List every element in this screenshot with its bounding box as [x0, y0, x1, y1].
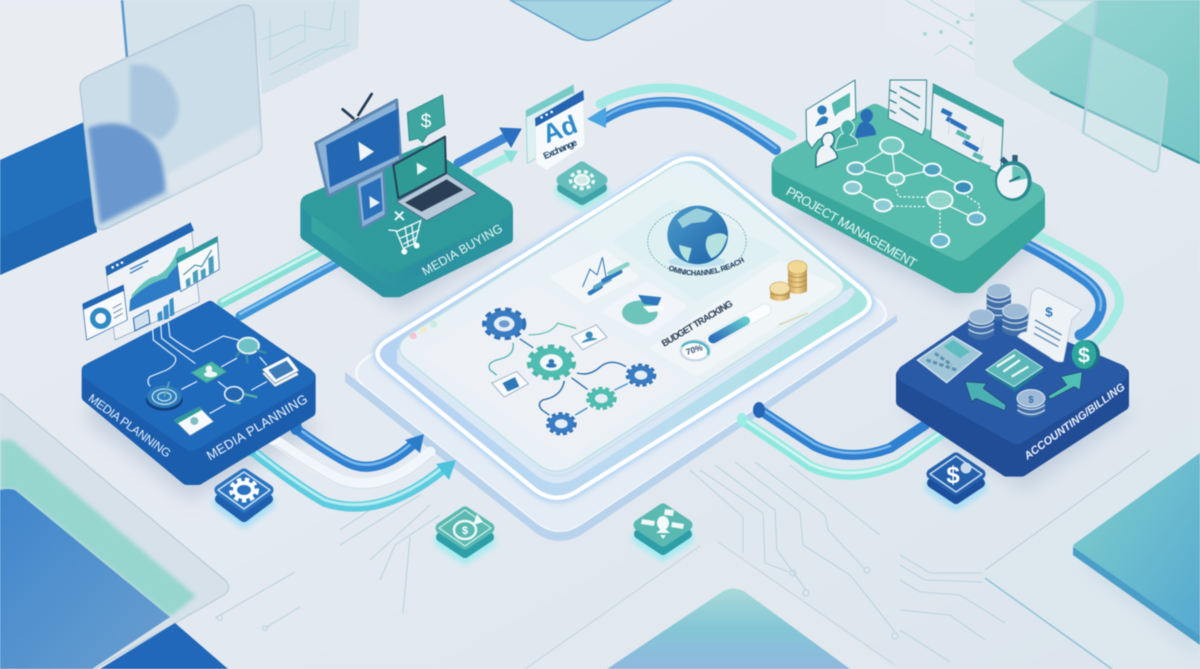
icon: small teal gear	[588, 388, 615, 408]
label: ACCOUNTING/BILLING	[1021, 381, 1128, 463]
window dots	[410, 321, 437, 339]
icon: gantt window	[931, 84, 1003, 175]
label: Ad: Ad	[538, 109, 581, 149]
icon: receipt	[1017, 288, 1082, 362]
icon: left arrow	[965, 382, 1006, 411]
label: Exchange: Exchange	[542, 137, 579, 161]
connector pipes: media planning to media buying	[222, 235, 354, 316]
panel: accounting and billing	[902, 283, 1128, 471]
neon ring	[378, 158, 870, 498]
panel: ad exchange card	[526, 85, 585, 171]
label: 70 percent: 70%	[685, 342, 704, 357]
icon: ledger	[986, 349, 1044, 392]
icon: picture card	[174, 407, 214, 436]
icon: small blue gear bottom	[548, 414, 575, 434]
workflow arrows	[489, 323, 627, 415]
panel: globe	[617, 202, 776, 298]
label: left side: MEDIA PLANNING	[86, 391, 174, 460]
box base	[902, 317, 1123, 471]
icon: cart	[388, 221, 421, 254]
box base	[306, 160, 507, 292]
icon: receipt: $	[1045, 305, 1053, 320]
icon: mail card	[492, 371, 528, 397]
circuit traces	[215, 462, 1005, 662]
icon: dollar coin: $	[1078, 344, 1090, 368]
box top	[310, 155, 503, 263]
icon: chat card	[806, 80, 856, 148]
pie chart	[622, 295, 664, 325]
box top	[782, 113, 1035, 252]
main dashboard window	[106, 223, 199, 340]
platform outer glass	[356, 156, 886, 532]
panel: media planning	[83, 223, 310, 479]
box top	[907, 318, 1118, 435]
icon: people	[816, 109, 876, 167]
icon: blue gear	[485, 310, 524, 338]
icon: coin stack small: $	[1028, 394, 1034, 404]
label: omnichannel reach: OMNICHANNEL REACH	[668, 256, 745, 276]
outer glass lower edge	[345, 315, 897, 541]
icon: users card	[571, 325, 607, 350]
right card with bars	[177, 237, 219, 292]
panel: line chart	[554, 253, 635, 301]
icon tile: money cycle	[439, 510, 491, 557]
icon tile: dollar: $	[946, 462, 960, 489]
label: right side: MEDIA PLANNING	[204, 391, 310, 463]
icon: calculator	[917, 336, 982, 383]
panel: workflow	[429, 287, 675, 453]
box shadows	[85, 200, 1135, 500]
icon: dollar coin	[1072, 340, 1100, 370]
network nodes	[844, 137, 985, 247]
icon: small blue gear right	[627, 365, 655, 385]
label: PROJECT MANAGEMENT	[783, 184, 919, 271]
icon: coin stacks	[968, 283, 1028, 340]
white flow lines	[148, 323, 267, 413]
icon: calendar	[262, 356, 299, 387]
left card with donut	[83, 285, 127, 340]
icon: television	[316, 94, 401, 196]
panel: pie	[606, 285, 683, 333]
coins	[770, 261, 808, 325]
box base	[87, 307, 310, 479]
icon: magnifier lower	[225, 387, 257, 403]
globe	[648, 206, 746, 275]
icon: dollar bubble	[407, 95, 445, 142]
icon: teal gear	[529, 347, 573, 378]
icon: right arrow	[1048, 372, 1082, 399]
icon: magnifier top	[236, 338, 267, 363]
connector pipes: project management to ad exchange	[587, 88, 792, 150]
icon: person tile	[192, 362, 226, 383]
panel: budget	[654, 263, 833, 373]
gauge	[681, 341, 709, 360]
mini bar and app icons	[133, 297, 174, 331]
icon tile: dollar	[930, 456, 982, 503]
platform thickness	[400, 290, 853, 480]
connector pipes: project management to accounting	[1001, 220, 1120, 345]
icon: plus	[395, 212, 404, 220]
glass top plate	[399, 163, 844, 471]
connector pipes: media planning to central platform	[243, 421, 456, 507]
panel: media buying	[306, 94, 507, 292]
icon: stopwatch	[995, 155, 1032, 201]
connector pipes: accounting to central platform	[737, 402, 950, 475]
box base	[777, 113, 1039, 287]
icon tile: gear near media planning	[218, 472, 270, 521]
icon tile: money cycle: $	[462, 525, 468, 537]
panel: project management	[777, 80, 1039, 287]
icon: phone	[357, 170, 386, 228]
line chart	[583, 257, 627, 293]
label: budget tracking: BUDGET TRACKING	[660, 298, 735, 350]
label: MEDIA BUYING	[419, 221, 505, 279]
progress bar	[711, 310, 765, 340]
panel: central platform	[344, 151, 898, 542]
network links	[853, 147, 980, 240]
icon tile: gear near ad exchange	[562, 167, 602, 203]
icon: laptop	[393, 137, 477, 221]
icon: checklist	[888, 80, 927, 135]
icon: target	[146, 382, 183, 411]
icon tile: satellite	[639, 509, 687, 554]
icon: dollar bubble: $	[421, 111, 432, 132]
box top	[92, 312, 305, 442]
icon: coin stack small	[1017, 390, 1045, 417]
connector pipes: media buying to ad exchange	[458, 128, 521, 173]
